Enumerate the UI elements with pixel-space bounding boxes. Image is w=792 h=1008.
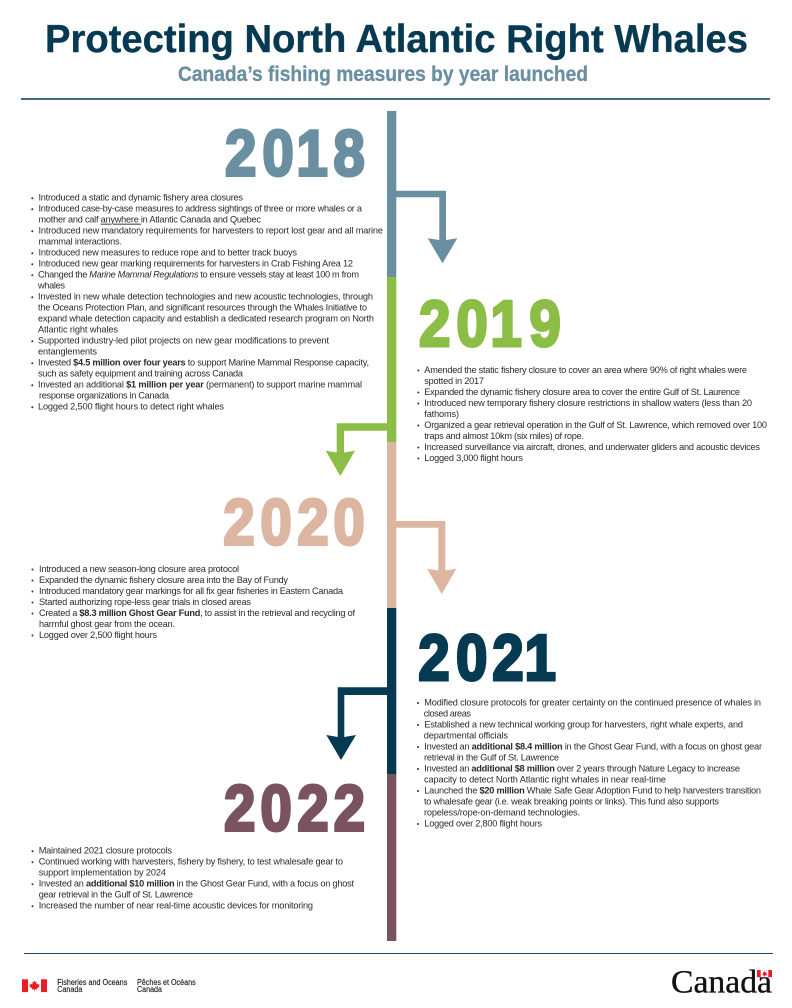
department name: English: Canada — [57, 985, 83, 994]
list: 2022 measures: gear retrieval in the Gulf of St. Lawrence — [39, 890, 193, 900]
list: 2019 measures: Increased surveillance via aircraft, drones, and underwater gliders and acoustic devices — [424, 442, 760, 452]
list: 2019 measures: Logged 3,000 flight hours — [424, 453, 523, 463]
year heading: 2018: 2018 — [225, 117, 365, 190]
list: 2022 measures: Maintained 2021 closure protocols — [39, 846, 172, 856]
department name: French: Canada — [137, 985, 162, 994]
list: 2018 measures: whales — [37, 281, 65, 291]
list: 2020 measures: Introduced mandatory gear markings for all fix gear fisheries in Eastern Canada — [39, 586, 344, 596]
list: 2019 measures: Amended the static fishery closure to cover an area where 90% of right whales were — [424, 365, 747, 375]
list: 2018 measures: Introduced new measures to reduce rope and to better track buoys — [38, 248, 297, 258]
list: 2018 measures: entanglements — [38, 347, 97, 357]
list: 2018 measures: expand whale detection capacity and establish a dedicated research program on North — [38, 314, 374, 324]
list: 2021 measures: Logged over 2,800 flight hours — [424, 818, 542, 828]
arrow: 2019 to 2020 — [326, 423, 387, 476]
list: 2021 measures: to whalesafe gear (i.e. weak breaking points or links). This fund also supports — [424, 796, 719, 806]
list: 2018 measures: Introduced new gear marking requirements for harvesters in Crab Fishing Area 12 — [38, 259, 353, 269]
list: 2018 measures: Supported industry-led pilot projects on new gear modifications to prevent — [38, 336, 329, 346]
list: 2018 measures: Invested an additional $1 million per year (permanent) to support marine mammal — [38, 380, 362, 390]
list: 2018 measures: the Oceans Protection Plan, and significant resources through the Whales Initiative to — [38, 303, 367, 313]
icon: Canadian flag — [22, 979, 47, 992]
department name: English — [57, 978, 127, 994]
list: 2021 measures: Modified closure protocols for greater certainty on the continued presence of whales in — [424, 698, 761, 708]
list: 2022 measures: Continued working with harvesters, fishery by fishery, to test whalesafe gear to — [39, 857, 343, 867]
Canada wordmark: Canada — [671, 965, 772, 1001]
list: 2019 measures: Introduced new temporary fishery closure restrictions in shallow waters (less than 20 — [424, 398, 752, 408]
list: 2020 measures: Expanded the dynamic fishery closure area into the Bay of Fundy — [39, 575, 288, 585]
panel: 2020 — [32, 486, 365, 640]
list: 2018 measures: such as safety equipment and training across Canada — [38, 369, 244, 379]
panel: 2019 — [417, 288, 767, 463]
list: 2020 measures: harmful ghost gear from the ocean. — [39, 619, 175, 629]
arrow: 2021 to 2022 — [326, 687, 387, 760]
list: 2018 measures: mammal interactions. — [38, 237, 122, 247]
panel: 2022 — [32, 772, 365, 911]
list: 2018 measures: response organizations in Canada — [39, 391, 170, 401]
list: 2018 measures: Invested $4.5 million over four years to support Marine Mammal Response capacity, — [38, 358, 369, 368]
title: Protecting North Atlantic Right Whales — [45, 18, 748, 61]
arrow: 2020 to 2021 — [396, 521, 456, 594]
footer: Fisheries and Oceans Canada signature — [22, 978, 196, 994]
list: 2018 measures: Introduced new mandatory requirements for harvesters to report lost gear and all marine — [38, 226, 383, 236]
list: 2019 measures: Organized a gear retrieval operation in the Gulf of St. Lawrence, which removed over 100 — [424, 420, 767, 430]
list: 2018 measures: Invested in new whale detection technologies and new acoustic technologies, through — [38, 292, 373, 302]
department name: English: Fisheries and Oceans — [57, 978, 127, 987]
list: 2022 measures — [32, 846, 354, 911]
list: 2018 measures: Introduced a static and dynamic fishery area closures — [38, 193, 243, 203]
list: 2021 measures: Launched the $20 million Whale Safe Gear Adoption Fund to help harvesters transition — [424, 786, 761, 796]
list: 2021 measures: capacity to detect North Atlantic right whales in near real-time — [424, 774, 666, 784]
department name: French: Pêches et Océans — [137, 978, 196, 987]
list: 2021 measures: closed areas — [424, 708, 471, 718]
list: 2019 measures — [417, 365, 767, 463]
list: 2019 measures: spotted in 2017 — [424, 376, 484, 386]
panel: 2018 — [31, 117, 383, 412]
year heading: 2021: 2021 — [418, 622, 556, 694]
department name: French — [137, 978, 196, 994]
list: 2019 measures: traps and almost 10km (six miles) of rope. — [424, 431, 584, 441]
list: 2018 measures — [31, 193, 383, 412]
list: 2021 measures: Established a new technical working group for harvesters, right whale experts, and — [424, 720, 743, 730]
list: 2022 measures: Increased the number of near real-time acoustic devices for monitoring — [39, 901, 313, 911]
arrow: 2018 to 2019 — [396, 191, 457, 263]
list: 2021 measures: ropeless/rope-on-demand technologies. — [424, 808, 580, 818]
list: 2019 measures: Expanded the dynamic fishery closure area to cover the entire Gulf of St. Laurence — [424, 387, 740, 397]
list: 2019 measures: fathoms) — [424, 409, 459, 419]
list: 2018 measures: Atlantic right whales — [38, 325, 118, 335]
list: 2018 measures: Introduced case-by-case measures to address sightings of three or more whales or a — [38, 204, 363, 214]
year heading: 2019: 2019 — [419, 288, 561, 360]
list: 2022 measures: Invested an additional $10 million in the Ghost Gear Fund, with a focus on ghost — [39, 879, 354, 889]
icon: wordmark flag — [757, 970, 772, 977]
panel: 2021 — [417, 622, 762, 828]
list: 2018 measures: Changed the Marine Mammal Regulations to ensure vessels stay at least 100 m from — [38, 270, 359, 280]
subtitle: Canada’s fishing measures by year launched — [178, 63, 588, 86]
list: 2020 measures: Logged over 2,500 flight hours — [39, 630, 157, 640]
list: 2020 measures: Created a $8.3 million Ghost Gear Fund, to assist in the retrieval and recycling of — [39, 608, 355, 618]
list: 2021 measures: retrieval in the Gulf of St. Lawrence — [424, 752, 559, 762]
list: 2022 measures: support implementation by 2024 — [39, 868, 166, 878]
year heading: 2020: 2020 — [223, 486, 365, 559]
list: 2018 measures: Logged 2,500 flight hours to detect right whales — [38, 402, 224, 412]
list: 2021 measures: Invested an additional $8.4 million in the Ghost Gear Fund, with a focus on ghost gear — [424, 742, 762, 752]
list: 2020 measures: Introduced a new season-long closure area protocol — [39, 564, 239, 574]
list: 2020 measures: Started authorizing rope-less gear trials in closed areas — [39, 597, 251, 607]
list: 2020 measures — [32, 564, 355, 640]
list: 2018 measures: mother and calf anywhere in Atlantic Canada and Quebec — [38, 215, 261, 225]
timeline bar — [387, 111, 396, 941]
year heading: 2022: 2022 — [224, 772, 365, 845]
list: 2021 measures: Invested an additional $8 million over 2 years through Nature Legacy to increase — [424, 764, 740, 774]
list: 2021 measures: departmental officials — [424, 730, 508, 740]
list: 2021 measures — [417, 698, 762, 828]
